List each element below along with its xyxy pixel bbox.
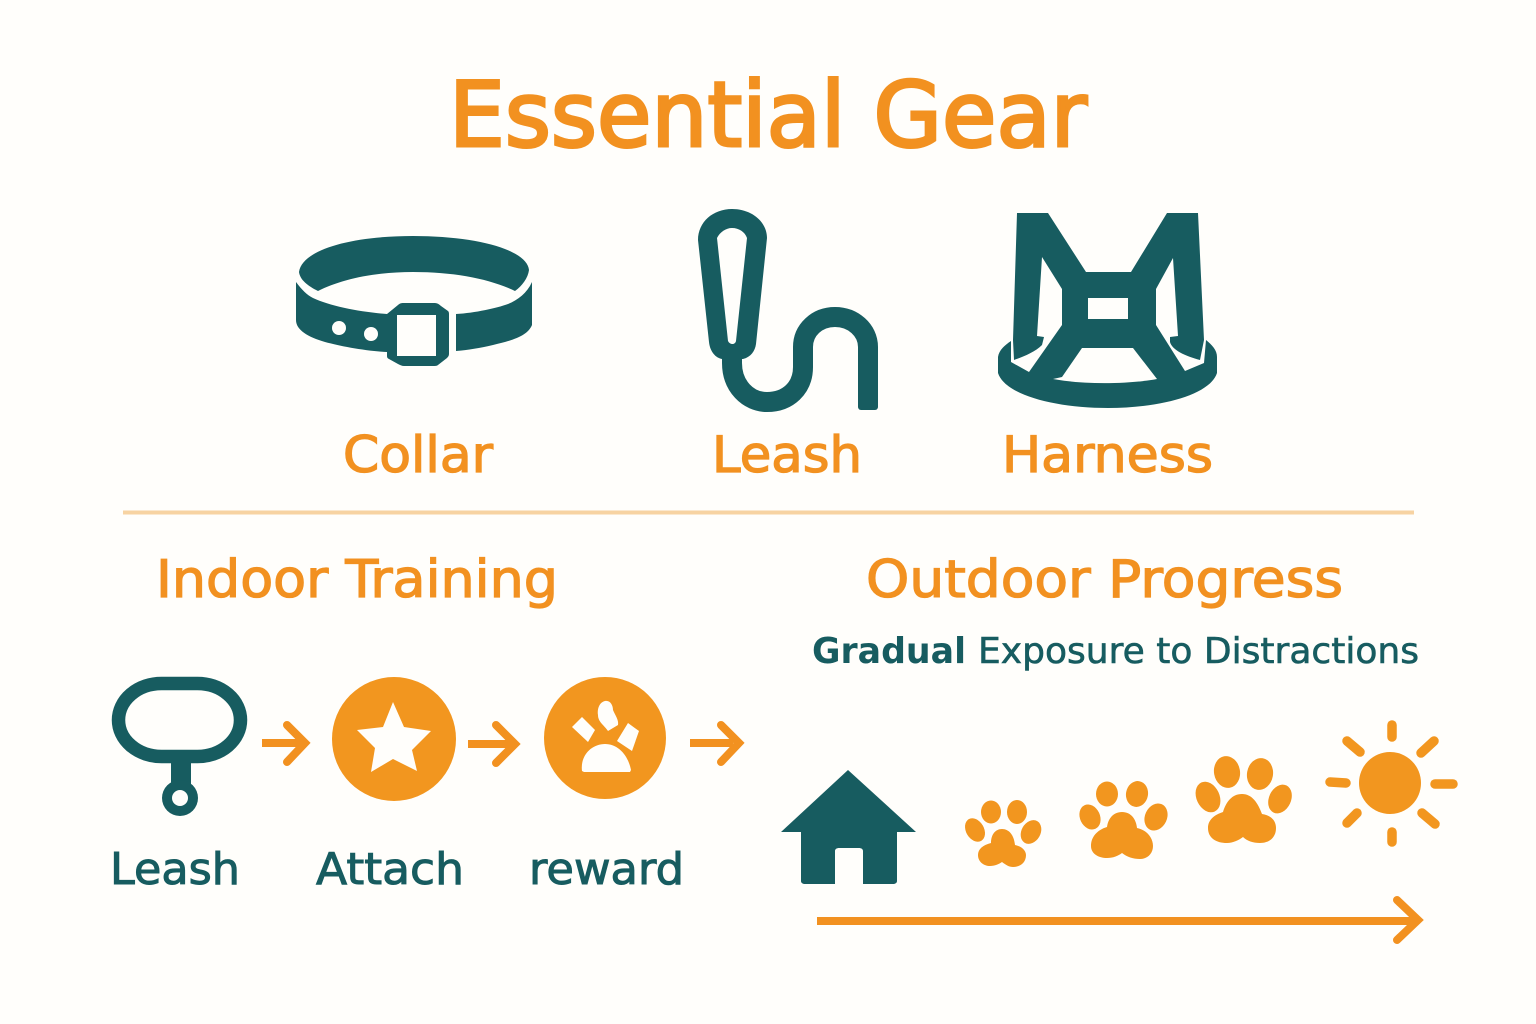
- label: reward step: reward: [529, 844, 684, 895]
- arrow: [468, 725, 515, 763]
- icon: house: [781, 770, 916, 884]
- subheading: gradual exposure: Exposure to Distractions: [978, 631, 1419, 672]
- icon: paw badge: [544, 677, 666, 799]
- arrow: [262, 725, 305, 762]
- label: harness: Harness: [1002, 426, 1213, 484]
- icon: collar: [296, 236, 532, 366]
- heading: indoor training: Indoor Training: [156, 550, 558, 610]
- subheading: gradual exposure: Gradual: [812, 631, 966, 672]
- icon: medium paw: [1075, 779, 1172, 859]
- heading: outdoor progress: Outdoor Progress: [866, 550, 1343, 610]
- arrow: [690, 725, 739, 762]
- label: attach step: Attach: [316, 844, 464, 895]
- arrow: progress timeline: [817, 900, 1418, 940]
- icon: leash: [698, 209, 878, 410]
- icon: harness: [998, 213, 1217, 408]
- title: Essential Gear: [449, 63, 1087, 168]
- icon: leash loop: [118, 684, 240, 816]
- divider: [123, 510, 1414, 514]
- label: leash: Leash: [712, 426, 862, 484]
- label: collar: Collar: [343, 426, 493, 484]
- icon: sun: [1330, 725, 1453, 842]
- icon: large paw: [1191, 754, 1296, 843]
- icon: star badge: [332, 677, 456, 801]
- label: leash step: Leash: [110, 844, 240, 895]
- icon: small paw: [961, 800, 1045, 867]
